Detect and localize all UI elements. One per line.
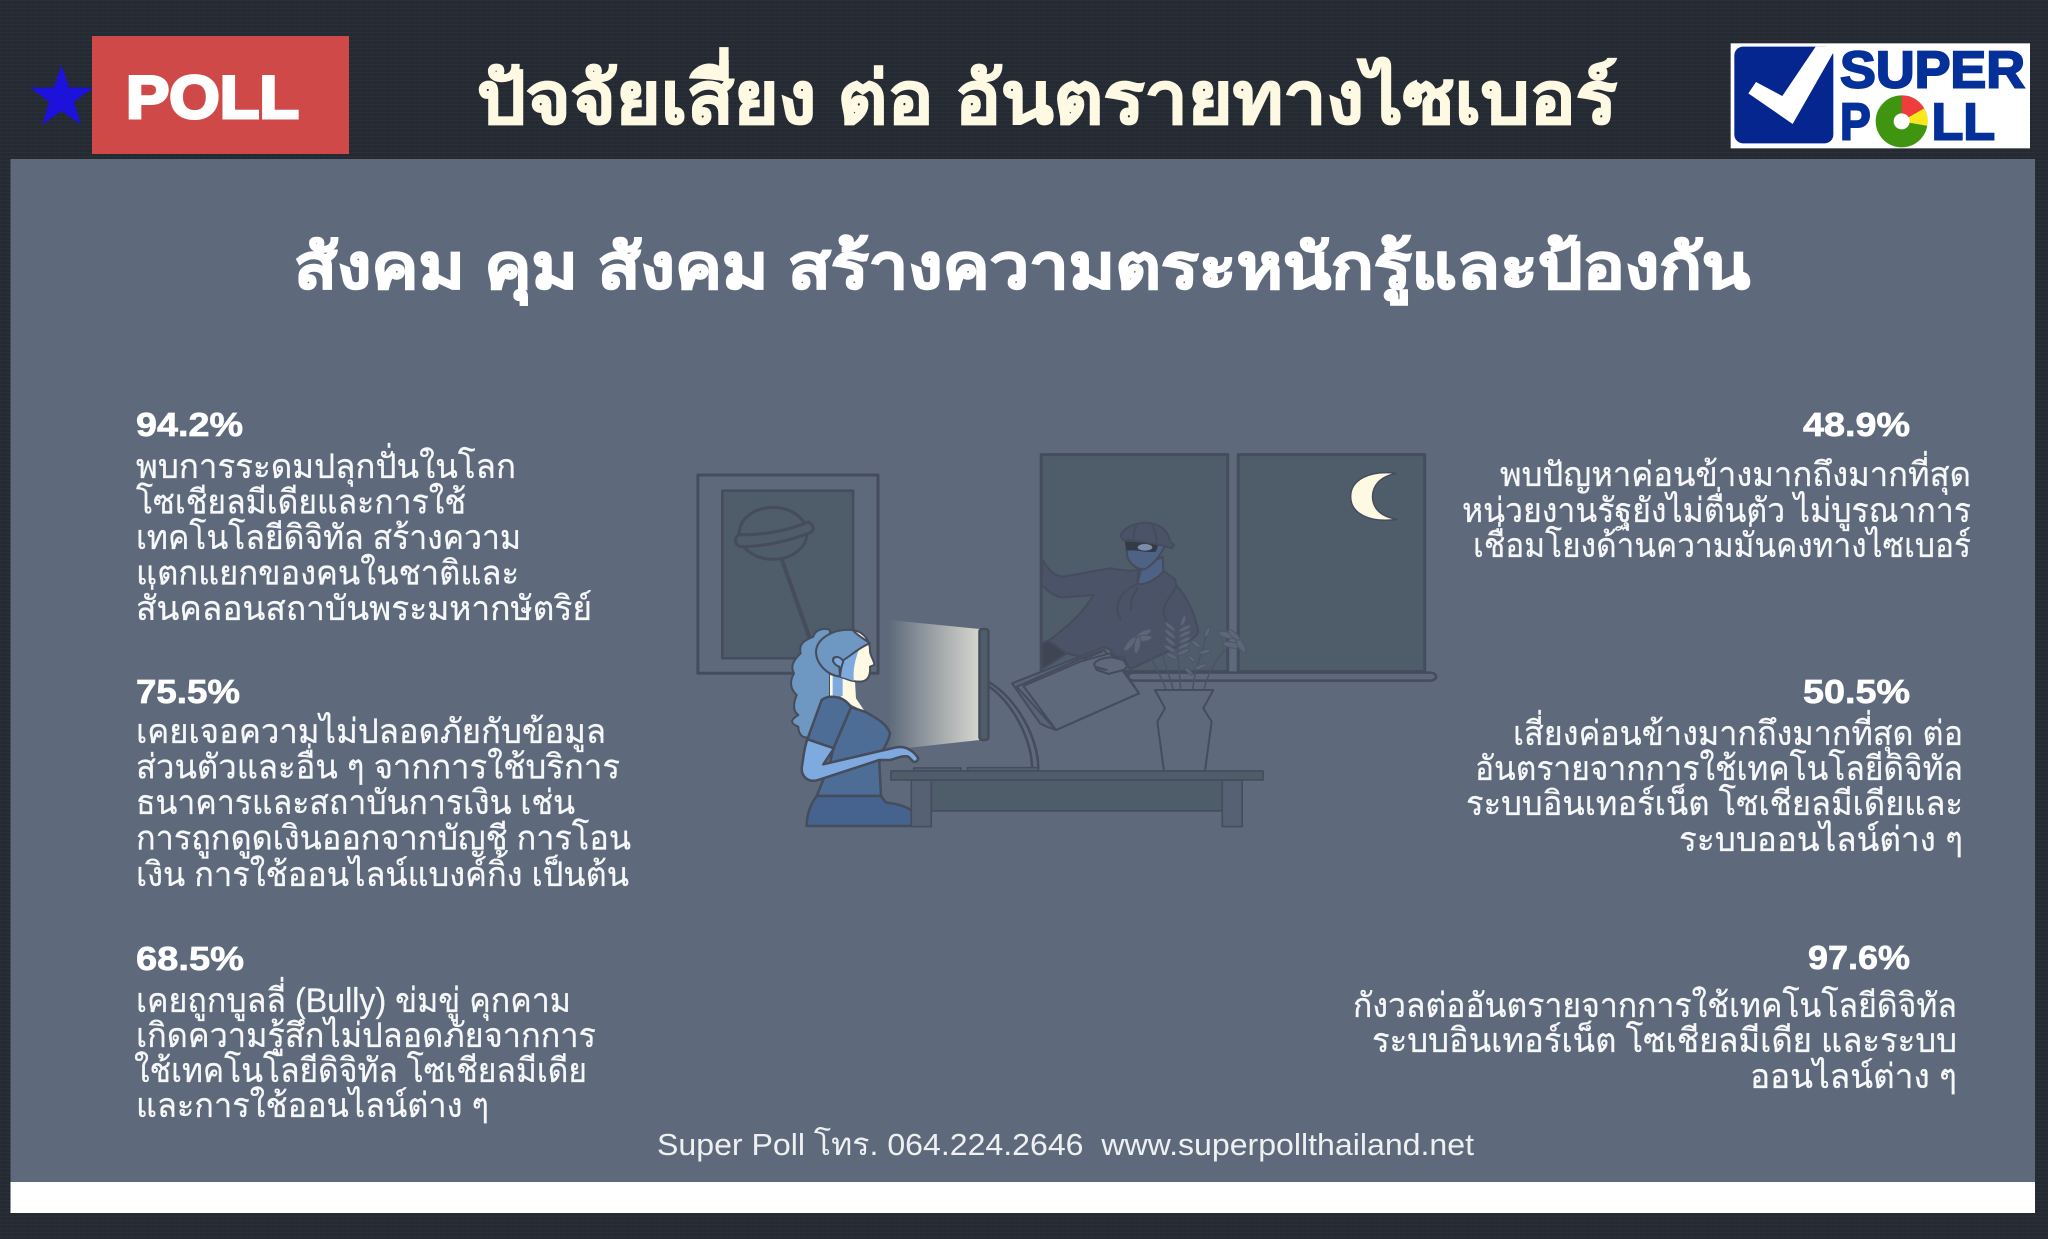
- stat block: 75.5%: [136, 673, 631, 894]
- logo: Super Poll: P: [1840, 93, 1871, 151]
- moon: [1351, 473, 1397, 520]
- window sill: [1128, 673, 1436, 681]
- stat block: 94.2%: พบการระดมปลุกปั่นในโลก: [136, 443, 516, 487]
- stat block: 75.5%: 75.5%: [136, 673, 240, 710]
- stat block: 50.5%: อันตรายจากการใช้เทคโนโลยีดิจิทัล: [1475, 749, 1963, 788]
- stat block: 94.2%: สั่นคลอนสถาบันพระมหากษัตริย์: [136, 585, 592, 628]
- stat block: 50.5%: [1466, 673, 1963, 859]
- stat block: 68.5%: ใช้เทคโนโลยีดิจิทัล โซเชียลมีเดีย: [134, 1051, 587, 1090]
- stat block: 50.5%: 50.5%: [1803, 673, 1910, 710]
- wall picture with lollipop tree: [698, 475, 878, 673]
- stat block: 94.2%: [136, 406, 592, 628]
- stat block: 97.6%: 97.6%: [1808, 939, 1910, 976]
- title: ปัจจัยเสี่ยง ต่อ อันตรายทางไซเบอร์: [477, 47, 1617, 139]
- stat block: 50.5%: เสี่ยงค่อนข้างมากถึงมากที่สุด ต่อ: [1513, 710, 1963, 754]
- stat block: 68.5%: 68.5%: [136, 940, 244, 977]
- stat block: 75.5%: เคยเจอความไม่ปลอดภัยกับข้อมูล: [136, 712, 606, 752]
- window panes: [1041, 455, 1425, 672]
- logo: Super Poll: SUPER: [1840, 41, 2025, 99]
- logo: Super Poll: [1730, 41, 2030, 151]
- stat block: 97.6%: [1353, 939, 1957, 1096]
- woman at computer: [791, 629, 918, 826]
- stat block: 94.2%: 94.2%: [136, 406, 243, 443]
- stat block: 48.9%: 48.9%: [1803, 406, 1910, 443]
- stat block: 48.9%: หน่วยงานรัฐยังไม่ตื่นตัว ไม่บูรณาการ: [1462, 487, 1971, 531]
- illustration: woman at computer with thief at window: [698, 455, 1436, 827]
- stat block: 94.2%: โซเชียลมีเดียและการใช้: [136, 482, 466, 522]
- white footer strip: [10, 1182, 2035, 1213]
- stat block: 75.5%: ธนาคารและสถาบันการเงิน เช่น: [136, 784, 575, 822]
- stat block: 94.2%: เทคโนโลยีดิจิทัล สร้างความ: [136, 518, 521, 557]
- stat block: 68.5%: เกิดความรู้สึกไม่ปลอดภัยจากการ: [136, 1016, 596, 1056]
- stat block: 97.6%: ออนไลน์ต่าง ๆ: [1750, 1057, 1957, 1096]
- stat block: 68.5%: [134, 940, 596, 1125]
- stat block: 68.5%: และการใช้ออนไลน์ต่าง ๆ: [136, 1086, 489, 1125]
- desk: [891, 771, 1263, 827]
- stat block: 50.5%: ระบบอินเทอร์เน็ต โซเชียลมีเดียและ: [1466, 783, 1963, 823]
- stat block: 97.6%: กังวลต่ออันตรายจากการใช้เทคโนโลยีดิจิทัล: [1353, 986, 1957, 1025]
- badge: POLL: [92, 36, 349, 154]
- stat block: 68.5%: เคยถูกบูลลี่ (Bully) ข่มขู่ คุกคาม: [136, 977, 571, 1021]
- stat block: 48.9%: พบปัญหาค่อนข้างมากถึงมากที่สุด: [1500, 451, 1971, 495]
- badge: POLL: POLL: [126, 64, 299, 131]
- logo: Super Poll: LL: [1932, 93, 1995, 151]
- icon: blue star: [30, 65, 93, 125]
- computer monitor with screen glow: [889, 620, 1038, 771]
- stat block: 94.2%: แตกแยกของคนในชาติและ: [136, 554, 519, 592]
- folder and thief's hand: [1012, 647, 1139, 730]
- stat block: 97.6%: ระบบอินเทอร์เน็ต โซเชียลมีเดีย และระบบ: [1372, 1020, 1957, 1060]
- stat block: 48.9%: [1462, 406, 1971, 565]
- stat block: 75.5%: เงิน การใช้ออนไลน์แบงค์กิ้ง เป็นต้น: [136, 850, 629, 894]
- stat block: 50.5%: ระบบออนไลน์ต่าง ๆ: [1679, 820, 1963, 859]
- stat block: 48.9%: เชื่อมโยงด้านความมั่นคงทางไซเบอร์: [1473, 522, 1971, 565]
- potted plant in vase: [1122, 615, 1248, 771]
- footer contact line: Super Poll โทร. 064.224.2646 www.superpollthailand.net: [657, 1127, 1474, 1162]
- thief in hoodie: [1042, 523, 1198, 669]
- stat block: 75.5%: ส่วนตัวและอื่น ๆ จากการใช้บริการ: [136, 744, 620, 786]
- stat block: 75.5%: การถูกดูดเงินออกจากบัญชี การโอน: [136, 818, 631, 858]
- subtitle: สังคม คุม สังคม สร้างความตระหนักรู้และป้องกัน: [294, 233, 1750, 305]
